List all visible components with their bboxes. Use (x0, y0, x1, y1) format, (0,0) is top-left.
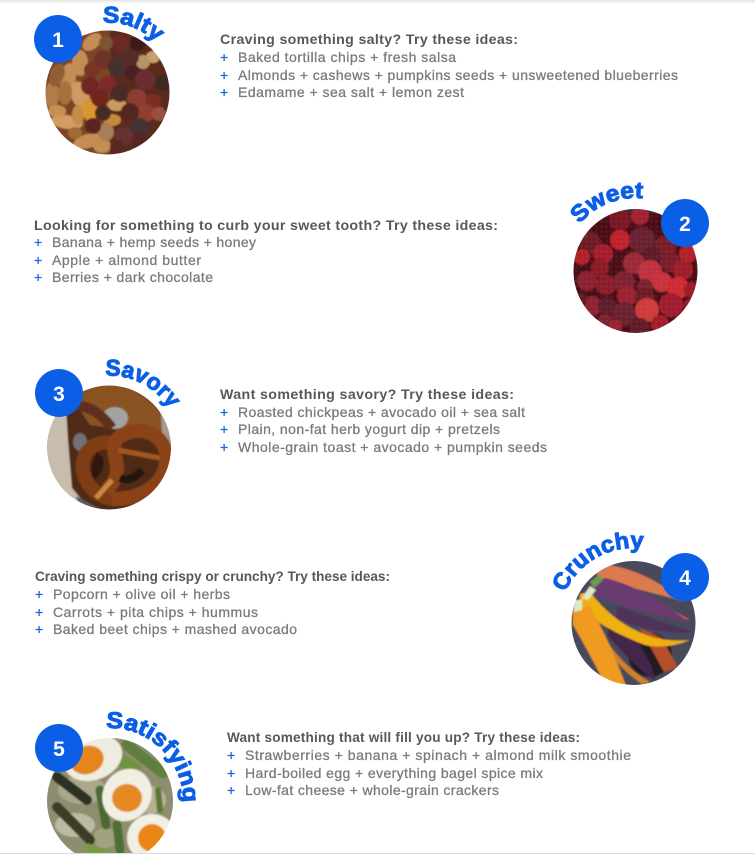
text block: crunchy ideas: Baked beet chips + mashed avocado (53, 621, 297, 637)
text block: sweet ideas: Apple + almond butter (52, 252, 201, 268)
text block: salty ideas: + (220, 49, 228, 65)
text block: salty ideas: + (220, 84, 228, 100)
text block: crunchy ideas: + (35, 586, 43, 602)
curved label: Savory: Savory (105, 359, 180, 406)
panel: savory (35, 359, 547, 510)
photo: raspberries (574, 209, 698, 333)
text block: salty ideas: Baked tortilla chips + fresh salsa (238, 49, 456, 65)
text block: salty ideas: Edamame + sea salt + lemon zest (238, 84, 464, 100)
text block: savory ideas: Whole-grain toast + avocado + pumpkin seeds (238, 439, 547, 455)
text block: sweet ideas: Berries + dark chocolate (52, 269, 213, 285)
text block: satisfying ideas: Strawberries + banana + spinach + almond milk smoothie (245, 747, 631, 763)
text block: savory ideas: + (220, 439, 228, 455)
text block: satisfying ideas: + (227, 765, 235, 781)
text block: crunchy ideas: + (35, 604, 43, 620)
panel: salty (34, 6, 678, 154)
badge: 2 (661, 199, 709, 247)
text block: salty ideas: Almonds + cashews + pumpkins seeds + unsweetened blueberries (238, 67, 678, 83)
text block: sweet ideas: + (34, 269, 42, 285)
badge: 3: 3 (53, 383, 65, 406)
badge: 5 (35, 724, 83, 772)
curved label: Sweet: Sweet (570, 182, 644, 222)
text block: savory ideas: Want something savory? Try these ideas: (220, 387, 514, 403)
text block: satisfying ideas: + (227, 782, 235, 798)
curved label: Salty: Salty (102, 6, 165, 42)
text block: satisfying ideas: Want something that will fill you up? Try these ideas: (227, 730, 580, 745)
text block: crunchy ideas (35, 569, 390, 637)
text block: sweet ideas: Banana + hemp seeds + honey (52, 234, 256, 250)
text block: crunchy ideas: Popcorn + olive oil + herbs (53, 586, 230, 602)
bottom page rule (0, 853, 755, 858)
text block: crunchy ideas: Craving something crispy or crunchy? Try these ideas: (35, 569, 390, 584)
curved label: Satisfying: Satisfying (106, 712, 196, 802)
badge: 4 (661, 553, 709, 601)
text block: sweet ideas: + (34, 252, 42, 268)
text block: crunchy ideas: + (35, 621, 43, 637)
text block: savory ideas: + (220, 421, 228, 437)
badge: 2: 2 (679, 213, 691, 236)
photo: pretzel (47, 386, 171, 510)
photo: rainbow carrots (572, 561, 696, 685)
badge: 1: 1 (52, 29, 64, 52)
text block: satisfying ideas: Low-fat cheese + whole-grain crackers (245, 782, 499, 798)
text block: savory ideas: + (220, 404, 228, 420)
panel: sweet (34, 182, 709, 333)
text block: sweet ideas: + (34, 234, 42, 250)
text block: salty ideas (220, 32, 678, 100)
photo: eggs and asparagus (47, 738, 173, 853)
text block: crunchy ideas: Carrots + pita chips + hummus (53, 604, 258, 620)
badge: 3 (35, 369, 83, 417)
text block: satisfying ideas: Hard-boiled egg + everything bagel spice mix (245, 765, 543, 781)
photo: mixed nuts (46, 30, 170, 154)
badge: 4: 4 (679, 567, 691, 590)
badge: 5: 5 (53, 738, 65, 761)
text block: savory ideas: Plain, non-fat herb yogurt dip + pretzels (238, 421, 500, 437)
text block: sweet ideas: Looking for something to curb your sweet tooth? Try these ideas: (34, 218, 498, 234)
panel: satisfying (0, 712, 755, 854)
panel: crunchy (35, 532, 709, 685)
text block: sweet ideas (34, 218, 498, 285)
curved label: Crunchy: Crunchy (553, 532, 644, 590)
text block: satisfying ideas: + (227, 747, 235, 763)
badge: 1 (34, 15, 82, 63)
text block: salty ideas: Craving something salty? Try these ideas: (220, 32, 518, 48)
text block: savory ideas (220, 387, 547, 455)
text block: salty ideas: + (220, 67, 228, 83)
text block: savory ideas: Roasted chickpeas + avocado oil + sea salt (238, 404, 525, 420)
text block: satisfying ideas (227, 730, 631, 798)
